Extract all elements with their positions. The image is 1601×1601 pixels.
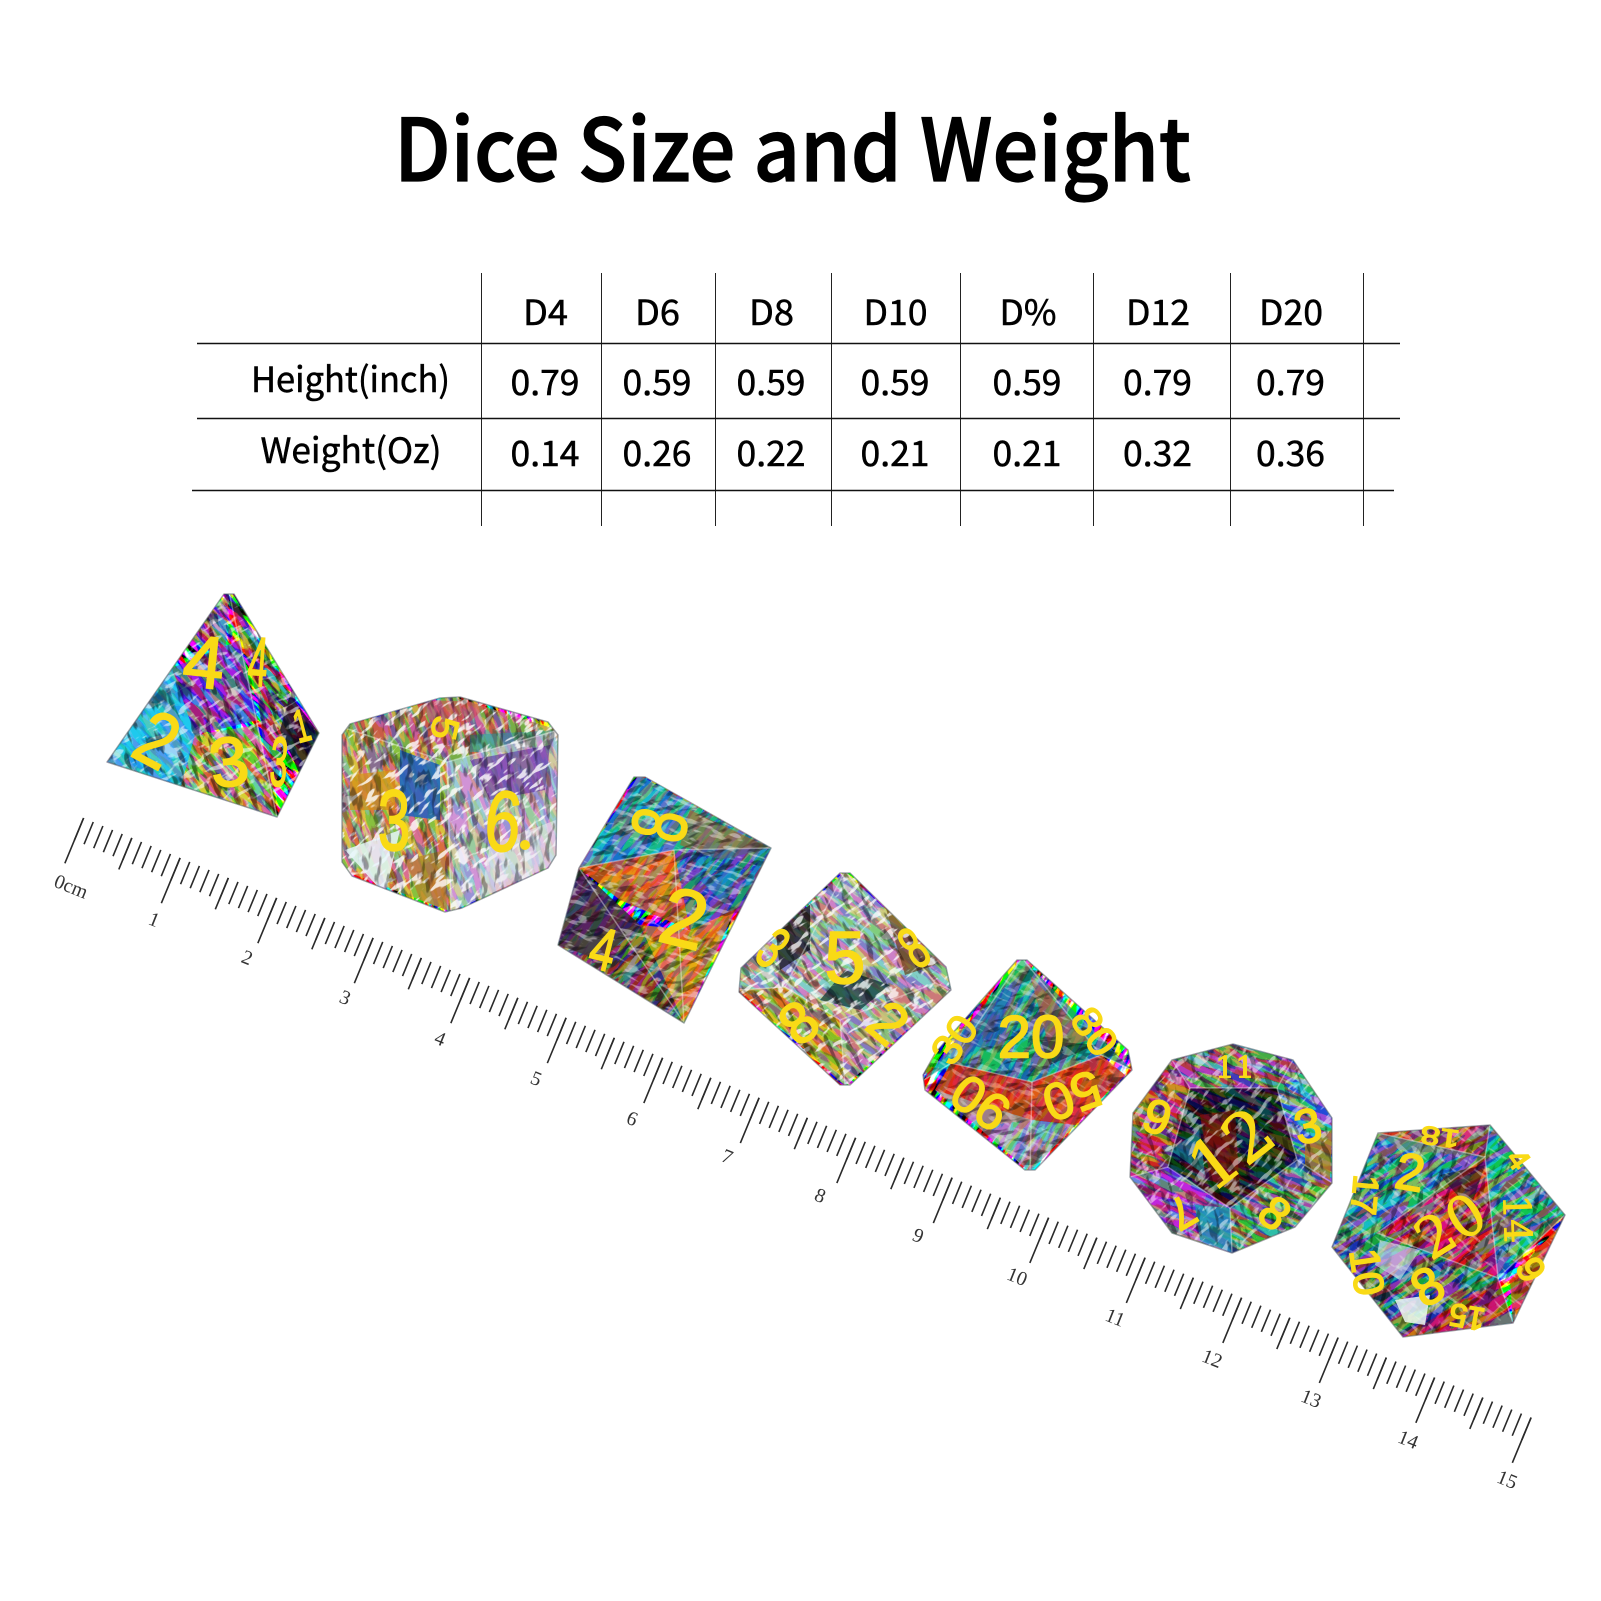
weight row: 0.26 [622,426,692,477]
icon: percentile die [922,959,1133,1171]
ruler labels: 6 [623,1107,641,1131]
icon: D12 die [1129,1043,1333,1254]
weight row: 0.21 [992,426,1062,477]
D10 numerals [744,914,942,1059]
ruler labels: 0cm [51,870,91,904]
table header row: D12 [1126,285,1190,336]
height row [251,352,1325,406]
icon: D8 die [557,776,772,1024]
table header row [523,285,1323,336]
D12 numerals: 11 [1215,1050,1255,1086]
percentile numerals: 30 [922,1007,988,1073]
ruler labels: 15 [1494,1466,1520,1494]
D12 numerals [1136,1050,1327,1241]
ruler labels: 2 [238,946,256,970]
D20 numerals: 20 [1404,1181,1498,1273]
D20 numerals: 2 [1391,1142,1429,1204]
ruler labels: 5 [527,1067,545,1091]
D10 numerals: 2 [855,988,921,1058]
D8 numerals: 2 [651,869,717,969]
D20 numerals: 18 [1419,1120,1461,1154]
table header row: D4 [523,285,568,336]
height row: 0.59 [736,355,806,406]
weight row: 0.36 [1256,426,1325,477]
height row: 0.79 [510,355,580,406]
D12 numerals: 8 [1248,1185,1302,1241]
D4 numerals: 4 [179,619,229,705]
D20 numerals: 8 [1401,1255,1455,1319]
D6 numerals [378,712,530,872]
D4 numerals: 1 [288,700,316,754]
D8 numerals: 8 [614,801,706,849]
percentile numerals [922,999,1127,1142]
ruler labels: 1 [145,908,163,932]
D6 numerals: 3 [378,771,410,869]
D4 numerals: 3 [204,721,254,803]
table header row: D% [1000,285,1056,336]
weight row: 0.21 [860,426,930,477]
ruler labels: 14 [1395,1426,1421,1454]
D8 numerals [583,801,717,985]
ruler labels: 13 [1298,1385,1324,1413]
table header row: D20 [1259,285,1323,336]
D12 numerals: 7 [1159,1185,1205,1239]
height row: 0.59 [622,355,692,406]
D4 numerals [120,619,316,803]
ruler labels: 4 [431,1027,449,1051]
ruler labels [51,870,1520,1494]
height row: 0.59 [860,355,930,406]
D10 numerals: 8 [886,914,942,982]
table header row: D10 [864,285,928,336]
D20 numerals: 4 [1500,1144,1536,1176]
ruler labels: 8 [811,1184,829,1208]
height row: 0.79 [1123,355,1192,406]
height row: 0.79 [1256,355,1325,406]
D10 numerals: 3 [744,915,802,981]
weight row [260,423,1325,477]
ruler [51,829,1527,1494]
D20 numerals: 14 [1494,1194,1540,1244]
title: Dice Size and Weight [394,81,1191,206]
percentile numerals: 80 [1061,999,1127,1065]
ruler labels: 3 [336,986,354,1010]
icon: D10 die [738,872,952,1086]
D12 numerals: 12 [1174,1092,1290,1208]
D20 numerals [1340,1120,1553,1338]
table header row: D8 [749,285,794,336]
icon: D4 die [106,593,320,818]
ruler labels: 9 [909,1224,927,1248]
D8 numerals: 4 [583,915,623,985]
ruler labels: 11 [1102,1304,1128,1332]
D6 numerals: 6 [480,772,526,872]
D20 numerals: 17 [1343,1173,1387,1217]
D10 numerals: 5 [824,916,866,1000]
weight row: 0.14 [510,426,580,477]
ruler labels: 12 [1199,1345,1225,1373]
ruler labels: 10 [1004,1263,1030,1291]
icon: D6 die [341,696,559,913]
D10 numerals: 8 [766,987,832,1059]
D6 numerals: 5 [422,712,466,744]
percentile numerals: 50 [1035,1058,1109,1132]
D4 numerals: 2 [120,693,194,787]
size and weight table [192,273,1400,526]
D12 numerals: 9 [1136,1089,1178,1147]
weight row: 0.32 [1123,426,1192,477]
D20 numerals: 10 [1340,1246,1394,1298]
table header row: D6 [635,285,680,336]
D20 numerals: 15 [1446,1296,1488,1338]
weight row: Weight(Oz) [260,423,442,474]
D4 numerals: 3 [268,722,290,802]
ruler labels: 7 [718,1145,736,1169]
height row: 0.59 [992,355,1062,406]
percentile numerals: 20 [998,1004,1064,1070]
percentile numerals: 90 [941,1062,1021,1142]
weight row: 0.22 [736,426,806,477]
D4 numerals: 4 [246,622,270,702]
D20 numerals: 9 [1507,1250,1553,1290]
height row: Height(inch) [251,352,450,403]
icon: D20 die [1331,1124,1566,1338]
D12 numerals: 3 [1289,1098,1327,1156]
